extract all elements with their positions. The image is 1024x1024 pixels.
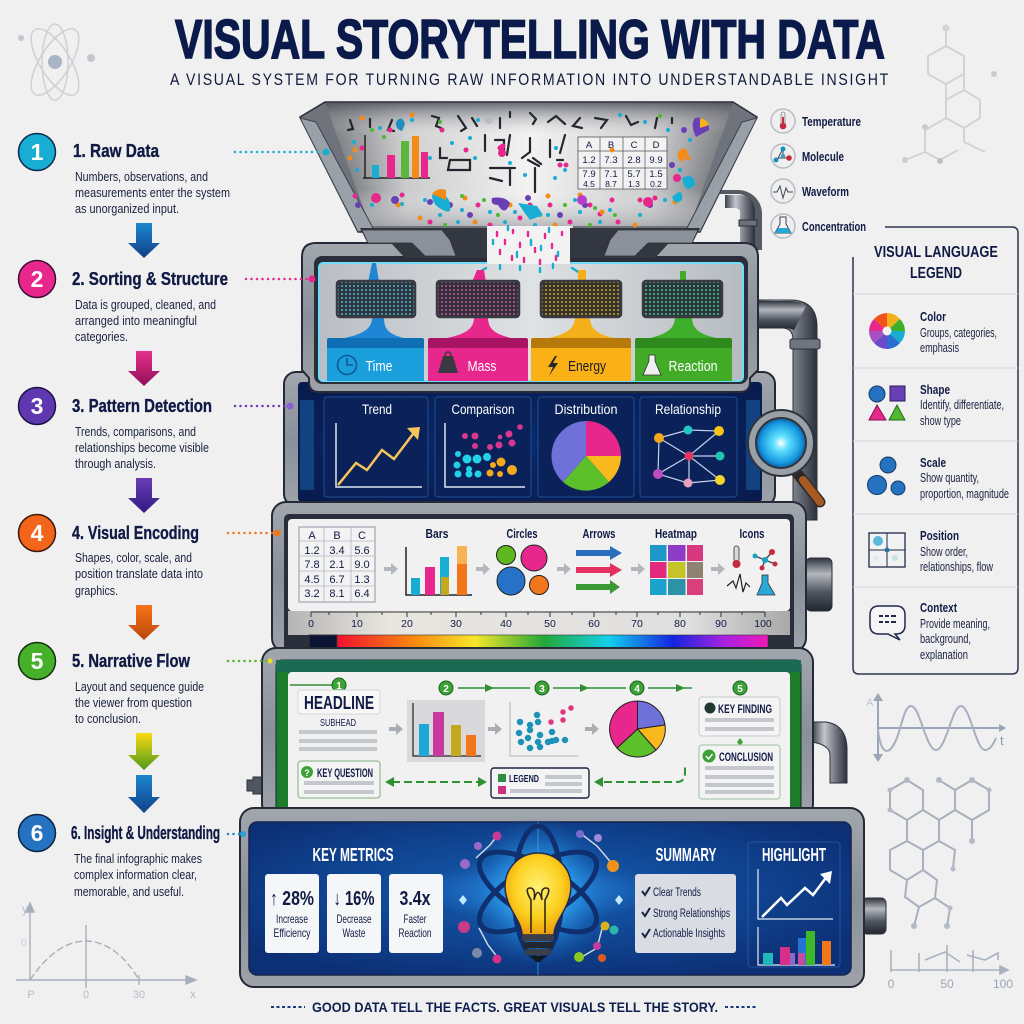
metric card 16 percent: Decrease [336, 912, 372, 926]
legend item: context: Provide meaning, [920, 616, 990, 631]
data table: 6.7 [329, 574, 345, 586]
legend item: context [870, 600, 990, 662]
step 1: raw data: 1. Raw Data [73, 141, 160, 161]
summary [635, 845, 736, 953]
sensor: temperature: Temperature [802, 114, 861, 129]
headline block: SUBHEAD [320, 718, 356, 729]
numbered nodes [332, 678, 747, 695]
funnel metal rim [300, 102, 757, 262]
legend item: position: relationships, flow [920, 559, 993, 574]
icons encoding: Icons [740, 526, 764, 541]
cell: comparison [435, 397, 531, 497]
legend panel: visual language: VISUAL LANGUAGE [874, 244, 998, 261]
funnel data table: A [586, 140, 593, 151]
numbered nodes: 3 [539, 684, 545, 695]
legend box [491, 768, 589, 798]
funnel collar left [360, 228, 487, 258]
decoration: sine wave chart: t [1000, 733, 1004, 748]
funnel data table: 7.9 [582, 169, 596, 180]
lightbulb [505, 853, 571, 962]
legend item: context: explanation [920, 647, 968, 662]
numbered nodes: 5 [737, 684, 743, 695]
ruler scale: 90 [715, 618, 727, 630]
data table: C [358, 530, 366, 542]
funnel data table: 1.3 [628, 179, 640, 189]
sensor: waveform: Waveform [802, 184, 849, 199]
layer 3 pattern detection [284, 372, 775, 506]
funnel data table: B [608, 140, 614, 151]
funnel data table: 4.5 [583, 179, 595, 189]
metric card 3.4x: 3.4x [400, 888, 430, 910]
arrow: step 5 yellow-green [128, 733, 160, 770]
metric card 3.4x: Reaction [398, 926, 432, 940]
pipe stub at layer 6 [862, 898, 886, 934]
cell: comparison: Comparison [452, 401, 514, 417]
pattern navy panel [298, 382, 762, 502]
step 2: sorting and structure: 2 [31, 266, 43, 292]
circles encoding [496, 526, 548, 595]
bin: mass [428, 338, 528, 381]
cell: distribution [538, 397, 634, 497]
layer 2 sorting chamber [302, 226, 758, 392]
bin: energy [531, 338, 631, 381]
metric card 28 percent [265, 874, 319, 953]
metric card 3.4x [389, 874, 443, 953]
pipe elbow at layer 5 [812, 722, 847, 783]
metric card 28 percent: Increase [276, 912, 308, 926]
step 5: narrative flow: 5 [31, 648, 44, 674]
funnel data table: D [653, 140, 660, 151]
bars encoding [406, 526, 472, 595]
data table [299, 527, 375, 602]
funnel data table: 9.9 [649, 155, 663, 166]
pattern frame [284, 372, 775, 506]
data table: 5.6 [354, 545, 370, 557]
data table: 7.8 [304, 559, 320, 571]
insight frame [240, 808, 864, 987]
ruler scale: 20 [401, 618, 413, 630]
metric card 16 percent [327, 874, 381, 953]
legend item: shape: show type [920, 413, 961, 428]
metric card 16 percent: ↓ 16% [334, 888, 375, 910]
cell: trend [324, 397, 428, 497]
subtitle: A VISUAL SYSTEM FOR TURNING RAW INFORMATION INTO UNDERSTANDABLE INSIGHT [170, 71, 890, 89]
key question box: ? [304, 768, 310, 778]
step 2: sorting and structure: Data is grouped, cleaned, and [75, 297, 216, 312]
legend item: position: Position [920, 528, 959, 543]
funnel bar chart [363, 135, 430, 178]
bin: reaction: Reaction [668, 358, 718, 375]
cell: trend: Trend [362, 401, 392, 417]
summary: Strong Relationships [653, 908, 730, 920]
decoration: small chart bottom right [888, 945, 1013, 991]
key metrics [265, 845, 443, 953]
dashed return arrows [385, 765, 685, 787]
bin: mass: Mass [468, 358, 496, 375]
conclusion box [699, 745, 780, 799]
ruler scale: 70 [631, 618, 643, 630]
decoration: parabola chart bottom left: y [22, 902, 28, 916]
funnel interior [325, 103, 733, 270]
encoding white panel [288, 519, 790, 611]
mesh filters [337, 281, 722, 317]
step 4: visual encoding [18, 514, 203, 598]
step 5: narrative flow: 5. Narrative Flow [72, 651, 191, 671]
insight blue panel [249, 822, 851, 975]
ruler scale: 30 [450, 618, 462, 630]
numbered nodes: 1 [336, 681, 342, 692]
legend item: shape [869, 382, 1004, 428]
step 2: sorting and structure [18, 260, 228, 344]
key question box: KEY QUESTION [317, 768, 373, 780]
legend panel: visual language: LEGEND [910, 265, 962, 282]
step 5: narrative flow [18, 642, 204, 726]
legend item: context: Context [920, 600, 958, 615]
decoration: sine wave chart [866, 693, 1006, 762]
decoration: parabola chart bottom left: x [190, 987, 196, 1001]
decoration: small chart bottom right: 100 [993, 977, 1013, 991]
atom orbits and molecules [458, 826, 623, 964]
step 1: raw data: measurements enter the system [75, 185, 230, 200]
highlight: HIGHLIGHT [762, 845, 826, 865]
step 3: pattern detection: 3. Pattern Detection [72, 396, 212, 416]
step 1: raw data: Numbers, observations, and [75, 169, 208, 184]
encoding frame [272, 502, 806, 652]
circles encoding: Circles [506, 526, 538, 541]
step 3: pattern detection: Trends, comparisons, and [75, 424, 196, 439]
funnel data table: 8.7 [605, 179, 617, 189]
step 2: sorting and structure: arranged into meaningful [75, 313, 197, 328]
footer tagline: GOOD DATA TELL THE FACTS. GREAT VISUALS TELL THE STORY. [312, 999, 718, 1015]
narrative white panel [288, 672, 790, 812]
funnel colored blobs [371, 116, 709, 220]
cell: distribution: Distribution [554, 401, 618, 417]
data table: A [308, 530, 316, 542]
metric card 3.4x: Faster [404, 912, 426, 926]
data table: 2.1 [329, 559, 345, 571]
flow arrows [384, 563, 725, 575]
bin: energy: Energy [568, 358, 606, 375]
decoration: small chart bottom right: 50 [940, 977, 954, 991]
step 5: narrative flow: Layout and sequence guide [75, 679, 204, 694]
decoration: parabola chart bottom left: P [27, 989, 35, 1001]
data table: 4.5 [304, 574, 320, 586]
step 3: pattern detection: relationships become visible [75, 440, 209, 455]
arrow: step 4 to 5 [128, 605, 160, 640]
legend item: color [869, 309, 997, 355]
highlight [748, 842, 840, 967]
step 5: narrative flow: the viewer from question [75, 695, 192, 710]
data table: 1.3 [354, 574, 370, 586]
funnel data table: C [631, 140, 638, 151]
icons encoding [727, 526, 778, 595]
funnel data table: 7.1 [604, 169, 618, 180]
legend item: position: Show order, [920, 544, 968, 559]
step 6: insight and understanding: memorable, and useful. [74, 884, 184, 899]
arrow: step 3 to 4 [128, 478, 160, 513]
cell: relationship: Relationship [655, 401, 721, 417]
step 4: visual encoding: 4 [31, 520, 44, 546]
legend item: scale: Show quantity, [920, 470, 979, 485]
funnel data table: 1.2 [582, 155, 596, 166]
layer 4 visual encoding [272, 502, 806, 652]
step 4: visual encoding: 4. Visual Encoding [72, 523, 199, 543]
legend box: LEGEND [509, 773, 539, 785]
legend item: scale [868, 455, 1009, 501]
decoration: parabola chart bottom left: 30 [133, 989, 145, 1001]
key question box [298, 761, 380, 798]
data table: 6.4 [354, 588, 370, 600]
headline block [298, 690, 380, 751]
headline block: HEADLINE [304, 693, 374, 713]
conclusion box: CONCLUSION [719, 750, 773, 764]
funnel data table: 0.2 [650, 179, 662, 189]
valve at layer 5 [247, 777, 262, 794]
metric card 28 percent: ↑ 28% [270, 888, 314, 910]
sensor: concentration: Concentration [802, 219, 866, 234]
heatmap encoding [650, 526, 703, 595]
arrows encoding [576, 526, 622, 594]
data table: B [333, 530, 341, 542]
decoration: hexagon molecule [888, 777, 992, 929]
pie thumbnail [610, 701, 665, 757]
sensor: molecule: Molecule [802, 149, 844, 164]
step 4: visual encoding: position translate data into [75, 566, 203, 581]
falling particles through neck [497, 230, 562, 264]
step 6: insight and understanding [18, 814, 220, 899]
key finding box: KEY FINDING [718, 702, 772, 716]
legend item: position [869, 528, 993, 574]
decoration: parabola chart bottom left: 0 [21, 938, 27, 949]
step 2: sorting and structure: categories. [75, 329, 128, 344]
funnel data table [578, 137, 667, 189]
heatmap encoding: Heatmap [655, 526, 697, 541]
step 4: visual encoding: graphics. [75, 583, 118, 598]
ruler scale: 80 [674, 618, 686, 630]
funnel neck opening [487, 226, 570, 264]
step 6: insight and understanding: The final infographic makes [74, 851, 202, 866]
data table: 8.1 [329, 588, 345, 600]
ruler scale: 0 [308, 618, 314, 630]
step 1: raw data: 1 [31, 139, 44, 165]
bars encoding: Bars [426, 526, 448, 541]
legend item: context: background, [920, 631, 971, 646]
decoration: sine wave chart: A [866, 697, 874, 709]
magnifying glass [748, 410, 820, 502]
decoration: molecule sketch top right [902, 26, 997, 164]
back pipes [718, 190, 820, 520]
connector dots [228, 148, 330, 837]
bar chart thumbnail [407, 700, 485, 762]
funnel data table: 1.5 [649, 169, 663, 180]
step 3: pattern detection [18, 388, 212, 471]
legend item: color: emphasis [920, 340, 959, 355]
data table: 3.4 [329, 545, 345, 557]
step 5: narrative flow: to conclusion. [75, 711, 141, 726]
summary: SUMMARY [656, 845, 716, 865]
metric card 16 percent: Waste [342, 926, 366, 940]
funnel collar right [570, 228, 700, 258]
step 2: sorting and structure: 2. Sorting & Structure [72, 269, 228, 289]
funnel data particles [348, 112, 690, 225]
summary: Clear Trends [653, 887, 701, 899]
bin: time: Time [366, 358, 392, 375]
arrow: step 1 to 2 [128, 223, 160, 258]
funnel data table: 7.3 [604, 155, 618, 166]
step 3: pattern detection: through analysis. [75, 456, 156, 471]
decoration: parabola chart bottom left [16, 902, 196, 1001]
step 1: raw data [18, 134, 230, 216]
step 4: visual encoding: Shapes, color, scale, and [75, 550, 192, 565]
metric card 28 percent: Efficiency [274, 926, 310, 940]
legend item: scale: Scale [920, 455, 946, 470]
sensor key [771, 109, 866, 238]
data table: 9.0 [354, 559, 370, 571]
step 3: pattern detection: 3 [31, 393, 43, 419]
layer 6 insight panel [240, 808, 864, 987]
light beam [463, 817, 613, 967]
data table: 3.2 [304, 588, 320, 600]
arrow: step 2 to 3 [128, 351, 160, 386]
color streams [335, 263, 725, 340]
narrative frame [262, 648, 813, 818]
layer 5 narrative flow [262, 648, 813, 818]
flow line [290, 685, 692, 688]
scatter thumbnail [510, 702, 578, 756]
funnel data table: 2.8 [627, 155, 641, 166]
gray flow arrows [389, 723, 599, 735]
narrative green panel [276, 660, 801, 818]
data table: 1.2 [304, 545, 320, 557]
decoration: atom sketch [18, 22, 95, 102]
connector finding to conclusion [737, 738, 743, 746]
ruler scale: 10 [351, 618, 363, 630]
ruler scale [288, 611, 790, 635]
legend item: color: Color [920, 309, 946, 324]
ruler scale: 100 [754, 618, 772, 630]
ruler scale: 60 [588, 618, 600, 630]
numbered nodes: 2 [443, 684, 449, 695]
funnel data table: 5.7 [627, 169, 641, 180]
ruler scale: 50 [544, 618, 556, 630]
bin: time [327, 338, 424, 381]
funnel hopper [300, 102, 757, 270]
key finding box [699, 697, 780, 736]
spectrum color bar [309, 635, 768, 649]
chamber frame [302, 243, 758, 392]
funnel side rails [300, 118, 757, 232]
chamber interior with glow [319, 263, 743, 381]
step 1: raw data: as unorganized input. [75, 201, 179, 216]
step 6: insight and understanding: 6 [31, 820, 43, 846]
side light bars [300, 400, 760, 490]
ruler scale: 40 [500, 618, 512, 630]
decoration: parabola chart bottom left: 0 [83, 989, 89, 1001]
decoration: small chart bottom right: 0 [888, 977, 895, 991]
cell: relationship [640, 397, 737, 497]
arrow: step 5 to 6 [128, 775, 160, 813]
legend item: shape: Shape [920, 382, 950, 397]
step 6: insight and understanding: 6. Insight & Understanding [71, 823, 220, 843]
arrows encoding: Arrows [582, 526, 616, 541]
key metrics: KEY METRICS [312, 845, 394, 865]
legend panel: visual language [853, 227, 1018, 674]
bin: reaction [635, 338, 732, 381]
summary: Actionable Insights [653, 928, 725, 940]
pipe stub at layer 4 [806, 558, 832, 611]
numbered nodes: 4 [634, 684, 640, 695]
step 6: insight and understanding: complex information clear, [74, 867, 197, 882]
